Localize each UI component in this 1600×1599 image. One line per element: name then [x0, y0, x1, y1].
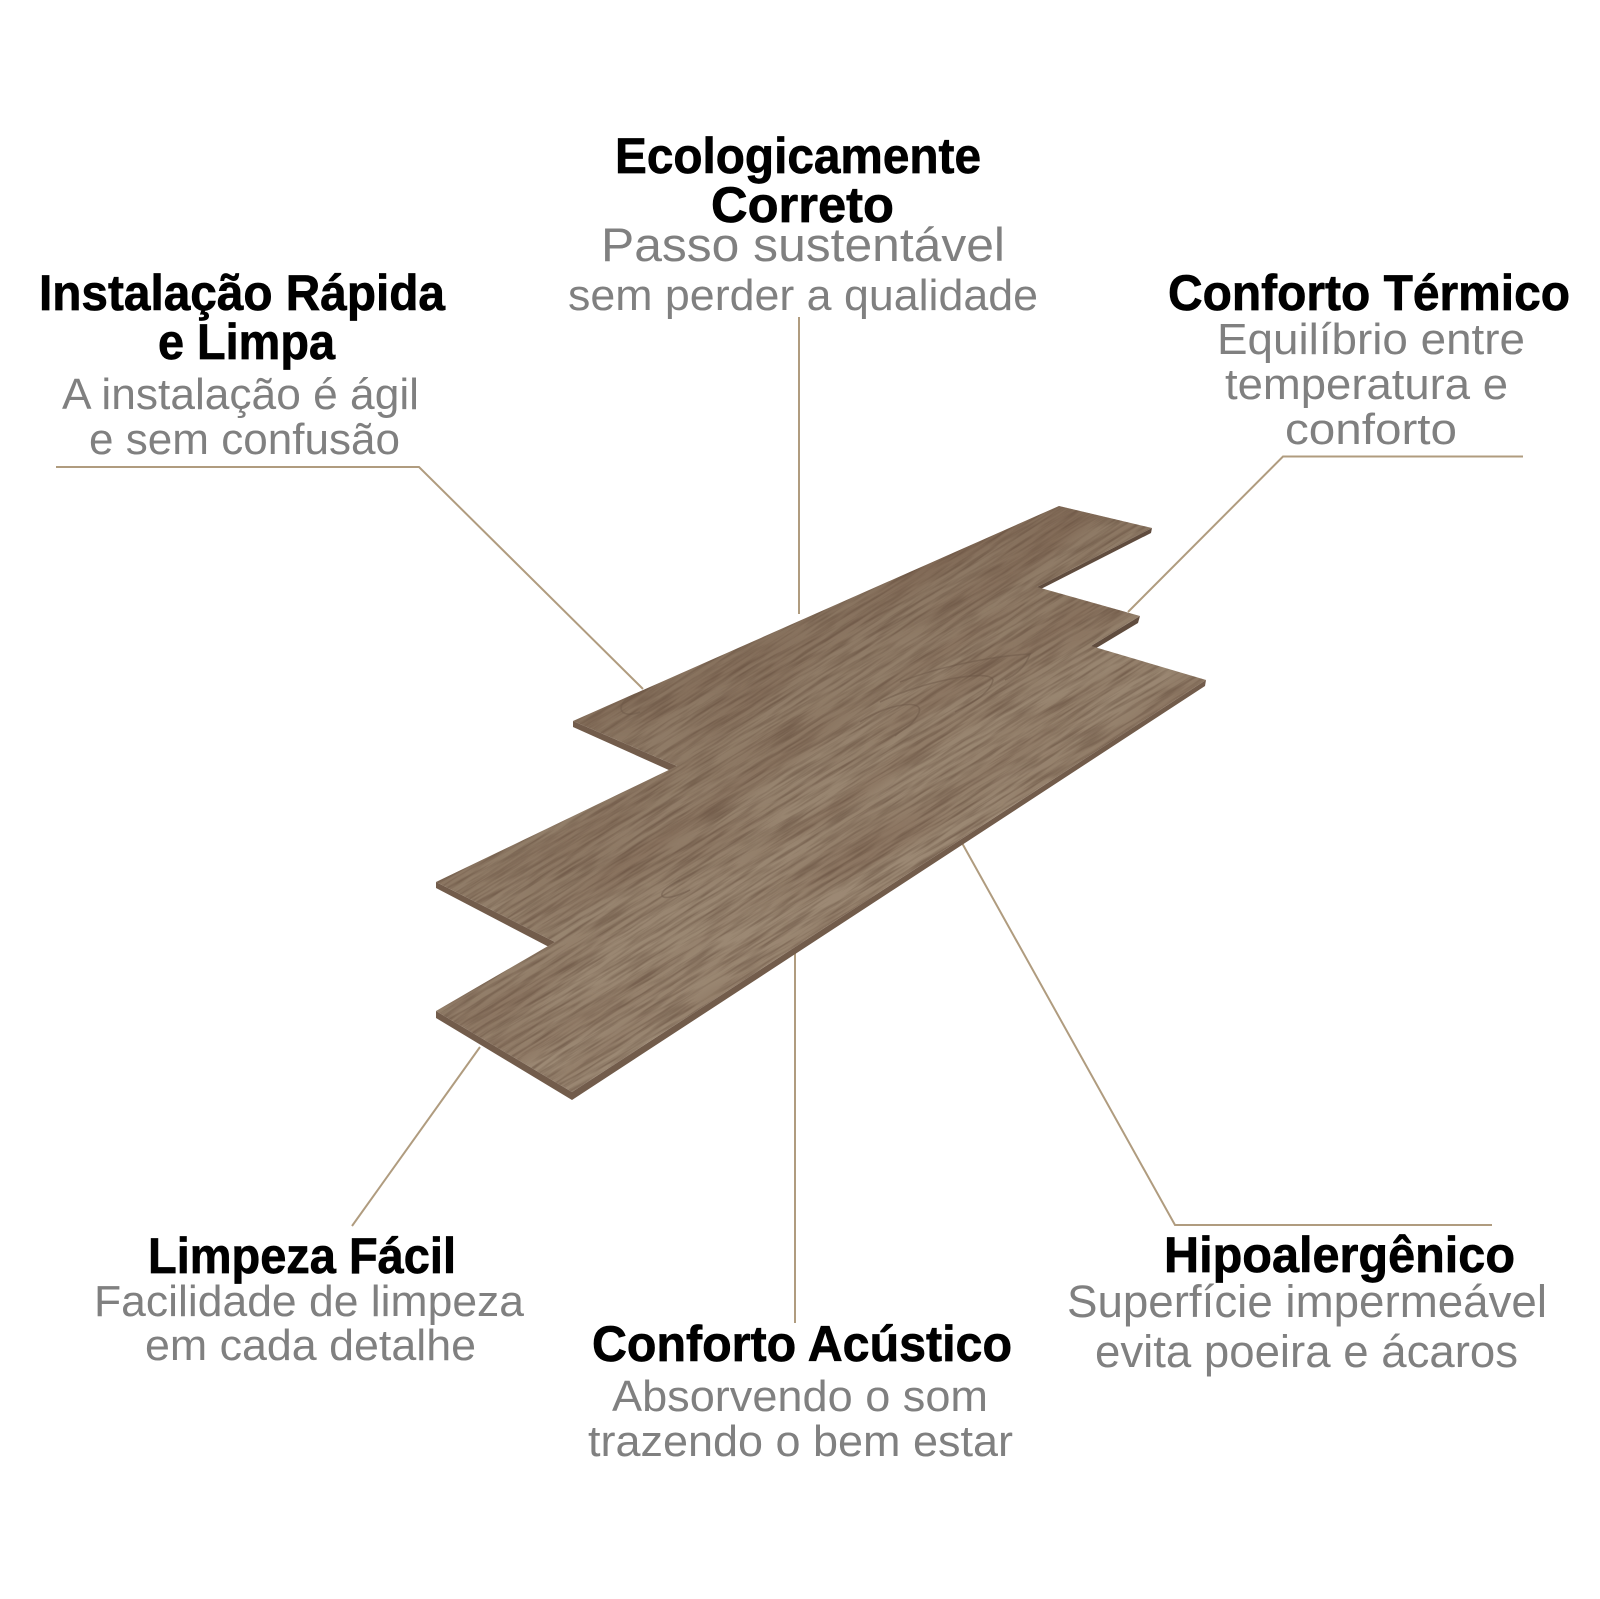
heading: Hipoalergênico: [1164, 1227, 1515, 1283]
description: Facilidade de limpeza: [94, 1277, 525, 1326]
heading: Conforto Térmico: [1168, 265, 1570, 321]
leader line: Instalação Rápida: [56, 467, 643, 689]
callout: Instalação Rápida e Limpa: [39, 265, 446, 464]
description: Equilíbrio entre: [1217, 315, 1525, 364]
heading: [615, 128, 981, 233]
description: Passo sustentável: [601, 218, 1005, 271]
heading: Conforto Acústico: [592, 1316, 1012, 1372]
description: trazendo o bem estar: [588, 1417, 1013, 1466]
heading: Limpeza Fácil: [148, 1228, 456, 1284]
heading: e Limpa: [158, 314, 336, 370]
heading: Correto: [711, 177, 894, 233]
heading: [39, 265, 446, 370]
leader line: Conforto Térmico: [1128, 456, 1523, 612]
leader line: Conforto Acústico: [794, 950, 796, 1323]
description: evita poeira e ácaros: [1095, 1326, 1518, 1377]
description: [568, 218, 1038, 320]
description: [1217, 315, 1525, 454]
description: em cada detalhe: [145, 1321, 476, 1370]
description: A instalação é ágil: [62, 370, 419, 419]
description: conforto: [1285, 405, 1457, 454]
callout: Hipoalergênico: [1067, 1227, 1547, 1377]
description: [1067, 1276, 1547, 1377]
description: e sem confusão: [89, 415, 400, 464]
description: [588, 1372, 1013, 1466]
callout: Conforto Térmico: [1168, 265, 1570, 454]
description: Superfície impermeável: [1067, 1276, 1547, 1327]
leader line: Ecologicamente Correto: [798, 317, 800, 614]
callout: Limpeza Fácil: [94, 1228, 525, 1370]
description: temperatura e: [1225, 360, 1508, 409]
leader line: Hipoalergênico: [962, 843, 1492, 1225]
wood planks: [436, 506, 1206, 1100]
description: sem perder a qualidade: [568, 271, 1038, 320]
leader line: Limpeza Fácil: [352, 1047, 480, 1226]
callout: Ecologicamente Correto: [568, 128, 1038, 320]
callout: Conforto Acústico: [588, 1316, 1013, 1466]
heading: Instalação Rápida: [39, 265, 446, 321]
description: [62, 370, 419, 464]
description: [94, 1277, 525, 1370]
heading: Ecologicamente: [615, 128, 981, 184]
description: Absorvendo o som: [612, 1372, 988, 1421]
